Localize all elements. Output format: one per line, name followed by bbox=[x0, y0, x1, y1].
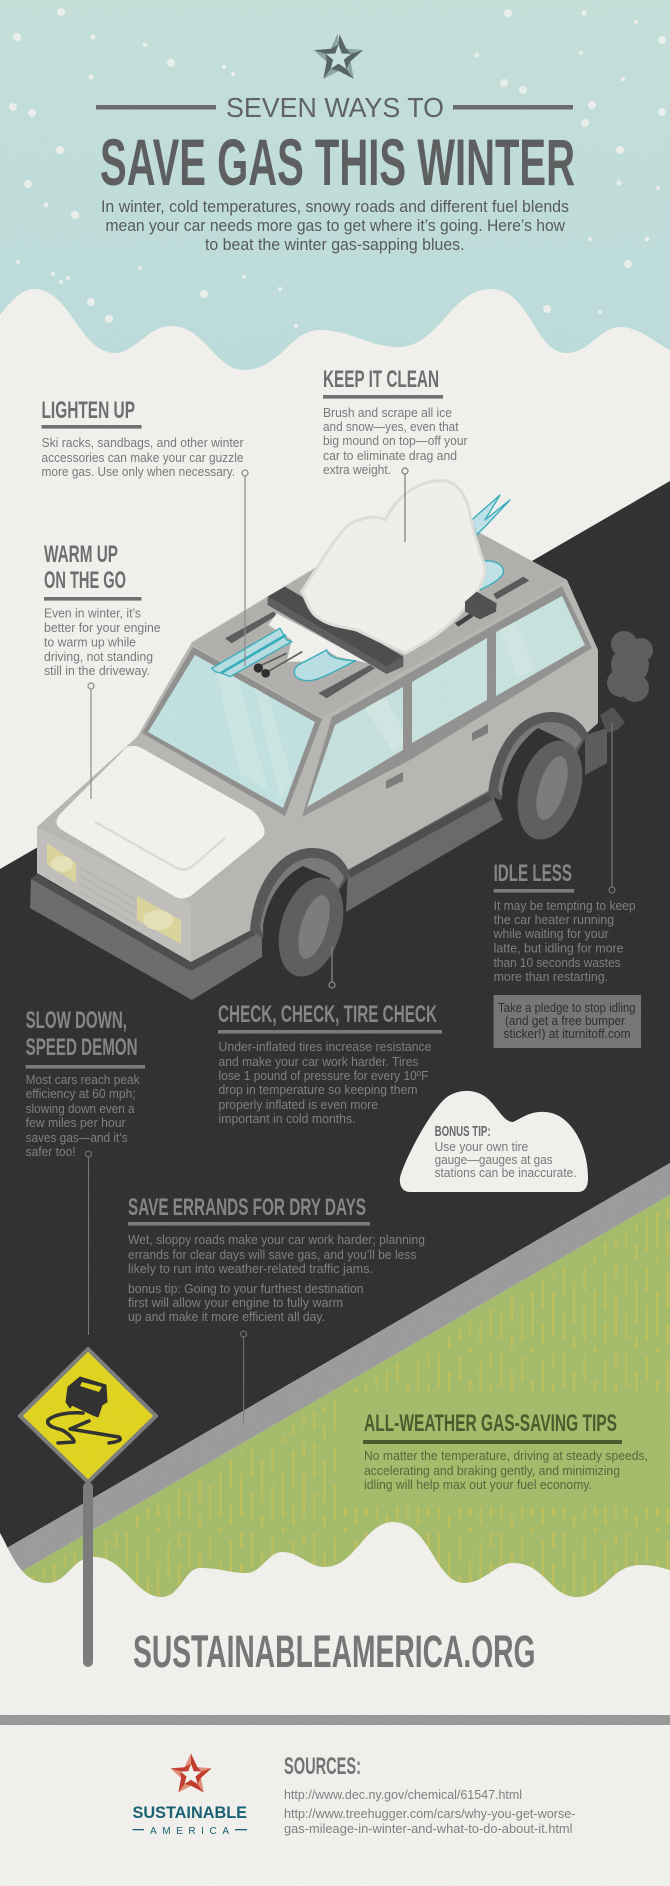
callout: bonus tip snow mound: stations can be inaccurate. bbox=[435, 1165, 577, 1180]
rear wheel arch bbox=[488, 712, 588, 800]
sources bbox=[284, 1753, 576, 1836]
pointer: warm up bbox=[88, 683, 94, 799]
front face bbox=[37, 827, 191, 962]
side window frame bbox=[302, 586, 592, 817]
crossbar top bbox=[268, 587, 403, 667]
windshield glass bbox=[148, 655, 315, 808]
windshield frame bbox=[142, 647, 322, 816]
side skirt strip bbox=[348, 792, 492, 878]
hood snow bbox=[56, 746, 265, 898]
rear rack bar lower bbox=[455, 613, 473, 627]
section: keep it clean: car to eliminate drag and bbox=[323, 448, 457, 463]
section: lighten up: more gas. Use only when necessary. bbox=[42, 464, 235, 479]
front underbody bbox=[30, 879, 262, 1000]
section: tire check bbox=[218, 1001, 442, 1126]
falling snowflakes bbox=[9, 8, 666, 328]
front wheel arch bbox=[250, 848, 350, 938]
section: keep it clean: KEEP IT CLEAN bbox=[323, 366, 439, 393]
section: warm up on the go: ON THE GO bbox=[44, 567, 126, 594]
section: all-weather tips: accelerating and braking gently, and minimizing bbox=[364, 1463, 620, 1478]
lower snowbank bbox=[0, 1522, 670, 1886]
section: idle less: than 10 seconds wastes bbox=[494, 955, 621, 970]
logo: Sustainable America: AMERICA bbox=[150, 1826, 229, 1837]
section: warm up on the go: driving, not standing bbox=[44, 649, 153, 664]
ski centre line bbox=[222, 635, 286, 673]
grille lines bbox=[80, 868, 136, 924]
road edge band bbox=[0, 1163, 670, 1584]
illustration: car bbox=[30, 481, 653, 1000]
rear skirt bbox=[585, 728, 607, 775]
front arch void bbox=[263, 866, 330, 965]
skidding car bbox=[66, 1377, 107, 1417]
section: idle less: more than restarting. bbox=[494, 969, 608, 984]
rear rack clamp bbox=[465, 592, 497, 619]
callout: bonus tip snow mound: BONUS TIP: bbox=[435, 1123, 491, 1140]
logo star bbox=[171, 1754, 211, 1792]
pointer: slow down bbox=[86, 1151, 92, 1335]
title kicker bbox=[96, 92, 573, 123]
sign post bbox=[83, 1482, 93, 1667]
section: save errands: SAVE ERRANDS FOR DRY DAYS bbox=[128, 1194, 366, 1221]
section: warm up on the go: to warm up while bbox=[44, 634, 136, 650]
section: keep it clean bbox=[323, 366, 468, 477]
sources: gas-mileage-in-winter-and-what-to-do-about-it.html bbox=[284, 1821, 573, 1836]
section: keep it clean: Brush and scrape all ice bbox=[323, 405, 452, 420]
front snowboard bbox=[294, 650, 356, 681]
callout: idling pledge: Take a pledge to stop idling bbox=[498, 1000, 636, 1015]
exhaust pipe bbox=[600, 707, 625, 733]
dark road slope bbox=[0, 481, 670, 1552]
section: idle less: latte, but idling for more bbox=[494, 940, 624, 956]
rear tire bbox=[506, 732, 594, 848]
section: lighten up: accessories can make your car guzzle bbox=[42, 450, 244, 465]
door handles bbox=[386, 724, 488, 789]
headlight left bbox=[47, 843, 76, 883]
section: save errands: bonus tip: Going to your furthest destination bbox=[128, 1281, 364, 1296]
rear rack bar bbox=[493, 577, 529, 599]
intro paragraph: mean your car needs more gas to get where it’s going. Here’s how bbox=[106, 216, 566, 235]
pole grips bbox=[254, 663, 270, 678]
section: save errands: Wet, sloppy roads make your car work harder; planning bbox=[128, 1232, 425, 1247]
window glare bbox=[365, 622, 535, 752]
intro paragraph: In winter, cold temperatures, snowy roads and different fuel blends bbox=[101, 197, 569, 216]
front arch inner ring bbox=[260, 858, 344, 935]
section: idle less: It may be tempting to keep bbox=[494, 898, 636, 913]
section: idle less: the car heater running bbox=[494, 912, 614, 927]
side window 2 bbox=[412, 638, 487, 743]
section: tire check: Under-inflated tires increase resistance bbox=[218, 1039, 432, 1054]
section: lighten up: Ski racks, sandbags, and other winter bbox=[42, 435, 244, 450]
pointer: lighten up bbox=[242, 470, 248, 666]
green grass field bbox=[0, 1195, 670, 1610]
section: slow down: few miles per hour bbox=[26, 1115, 126, 1130]
section: slow down: efficiency at 60 mph; bbox=[26, 1086, 136, 1101]
section: lighten up: LIGHTEN UP bbox=[42, 397, 135, 424]
section: tire check: CHECK, CHECK, TIRE CHECK bbox=[218, 1001, 437, 1028]
section: save errands: errands for clear days will save gas, and you’ll be less bbox=[128, 1247, 417, 1262]
section: save errands: likely to run into weather-related traffic jams. bbox=[128, 1261, 373, 1276]
sign diamond bbox=[20, 1349, 156, 1482]
section: all-weather tips: No matter the temperature, driving at steady speeds, bbox=[364, 1448, 648, 1463]
section: tire check: lose 1 pound of pressure for every 10ºF bbox=[218, 1068, 429, 1083]
section: slow down bbox=[26, 1007, 145, 1159]
front bumper strip bbox=[31, 874, 255, 971]
section: keep it clean: extra weight. bbox=[323, 462, 391, 477]
section: tire check: and make your car work harder. Tires bbox=[218, 1054, 419, 1069]
front skis bbox=[212, 628, 292, 677]
section: idle less bbox=[493, 860, 636, 984]
section: slow down: SPEED DEMON bbox=[26, 1034, 138, 1061]
roof bbox=[192, 503, 567, 717]
side underbody bbox=[346, 790, 503, 912]
logo: Sustainable America: SUSTAINABLE bbox=[132, 1803, 247, 1822]
section: slow down: Most cars reach peak bbox=[26, 1072, 140, 1087]
pointer: idle less bbox=[609, 723, 615, 893]
section: lighten up bbox=[42, 397, 244, 479]
big snow mound bbox=[302, 481, 485, 653]
section: slow down: saves gas—and it’s bbox=[26, 1130, 128, 1145]
main crossbar side bbox=[268, 597, 403, 674]
grass stripes bbox=[0, 1205, 670, 1610]
sources: http://www.treehugger.com/cars/why-you-get-worse- bbox=[284, 1806, 576, 1821]
windshield glare bbox=[215, 666, 292, 800]
side window 3 bbox=[496, 596, 585, 696]
hood groove bbox=[95, 822, 225, 869]
pointer: tire check bbox=[329, 947, 335, 988]
body shell bbox=[37, 503, 598, 962]
front snow lump bbox=[268, 613, 370, 663]
rear arch inner ring bbox=[498, 722, 582, 798]
section: warm up on the go: Even in winter, it’s bbox=[44, 606, 141, 620]
section: keep it clean: big mound on top—off your bbox=[323, 433, 468, 448]
headlight glows bbox=[51, 856, 173, 930]
front hub bbox=[292, 892, 336, 962]
section: warm up on the go: still in the driveway. bbox=[44, 663, 150, 678]
back skis bbox=[472, 495, 510, 535]
rear hub bbox=[530, 753, 574, 823]
ski poles bbox=[258, 652, 302, 673]
section: slow down: slowing down even a bbox=[26, 1101, 135, 1116]
section: keep it clean: and snow—yes, even that bbox=[323, 419, 459, 434]
rear arch void bbox=[502, 728, 565, 830]
callout: bonus tip snow mound: Use your own tire bbox=[435, 1139, 528, 1154]
section: slow down: safer too! bbox=[26, 1144, 76, 1159]
section: save errands: up and make it more efficient all day. bbox=[128, 1309, 325, 1324]
side window 1 bbox=[307, 687, 403, 807]
roof load in scaled coordinates bbox=[212, 481, 529, 698]
callout: idling pledge bbox=[494, 995, 641, 1048]
icon: slippery road sign bbox=[20, 1349, 156, 1667]
section: idle less: while waiting for your bbox=[493, 926, 609, 941]
section: all-weather tips: idling will help max out your fuel economy. bbox=[364, 1477, 592, 1492]
intro paragraph: to beat the winter gas-sapping blues. bbox=[205, 235, 464, 254]
section: save errands: first will allow your engine to fully warm bbox=[128, 1295, 343, 1310]
section: all-weather tips bbox=[363, 1410, 648, 1492]
icon: title star bbox=[314, 30, 363, 79]
headlight right bbox=[137, 896, 181, 944]
intro paragraph bbox=[101, 197, 569, 254]
section: tire check: drop in temperature so keeping them bbox=[218, 1082, 418, 1097]
title kicker: SEVEN WAYS TO bbox=[226, 92, 444, 123]
sources: SOURCES: bbox=[284, 1753, 361, 1780]
callout: bonus tip snow mound: gauge—gauges at gas bbox=[435, 1152, 553, 1167]
skid marks bbox=[48, 1413, 120, 1443]
car rear window bbox=[80, 1382, 102, 1392]
section: warm up on the go: better for your engine bbox=[44, 620, 161, 635]
section: warm up on the go: WARM UP bbox=[44, 541, 118, 568]
pointer: keep it clean bbox=[402, 468, 408, 542]
section: warm up on the go bbox=[44, 541, 161, 678]
footer divider bbox=[0, 1715, 670, 1725]
section: save errands bbox=[128, 1194, 425, 1324]
back snowboard bbox=[480, 561, 503, 590]
logo: Sustainable America bbox=[132, 1754, 247, 1837]
sky with snowbank edge bbox=[0, 0, 670, 370]
section: tire check: important in cold months. bbox=[218, 1111, 356, 1126]
callout: idling pledge: (and get a free bumper bbox=[505, 1013, 626, 1028]
front tire bbox=[267, 869, 355, 985]
pointer: save errands bbox=[241, 1331, 247, 1423]
sources: http://www.dec.ny.gov/chemical/61547.html bbox=[284, 1787, 522, 1802]
section: idle less: IDLE LESS bbox=[494, 860, 572, 887]
section: slow down: SLOW DOWN, bbox=[26, 1007, 127, 1034]
callout: bonus tip snow mound bbox=[400, 1091, 588, 1192]
section: tire check: properly inflated is even more bbox=[218, 1097, 378, 1112]
small roof bars bbox=[225, 612, 375, 698]
callout: idling pledge: sticker!) at iturnitoff.com bbox=[504, 1026, 630, 1041]
exhaust smoke bbox=[607, 631, 653, 702]
